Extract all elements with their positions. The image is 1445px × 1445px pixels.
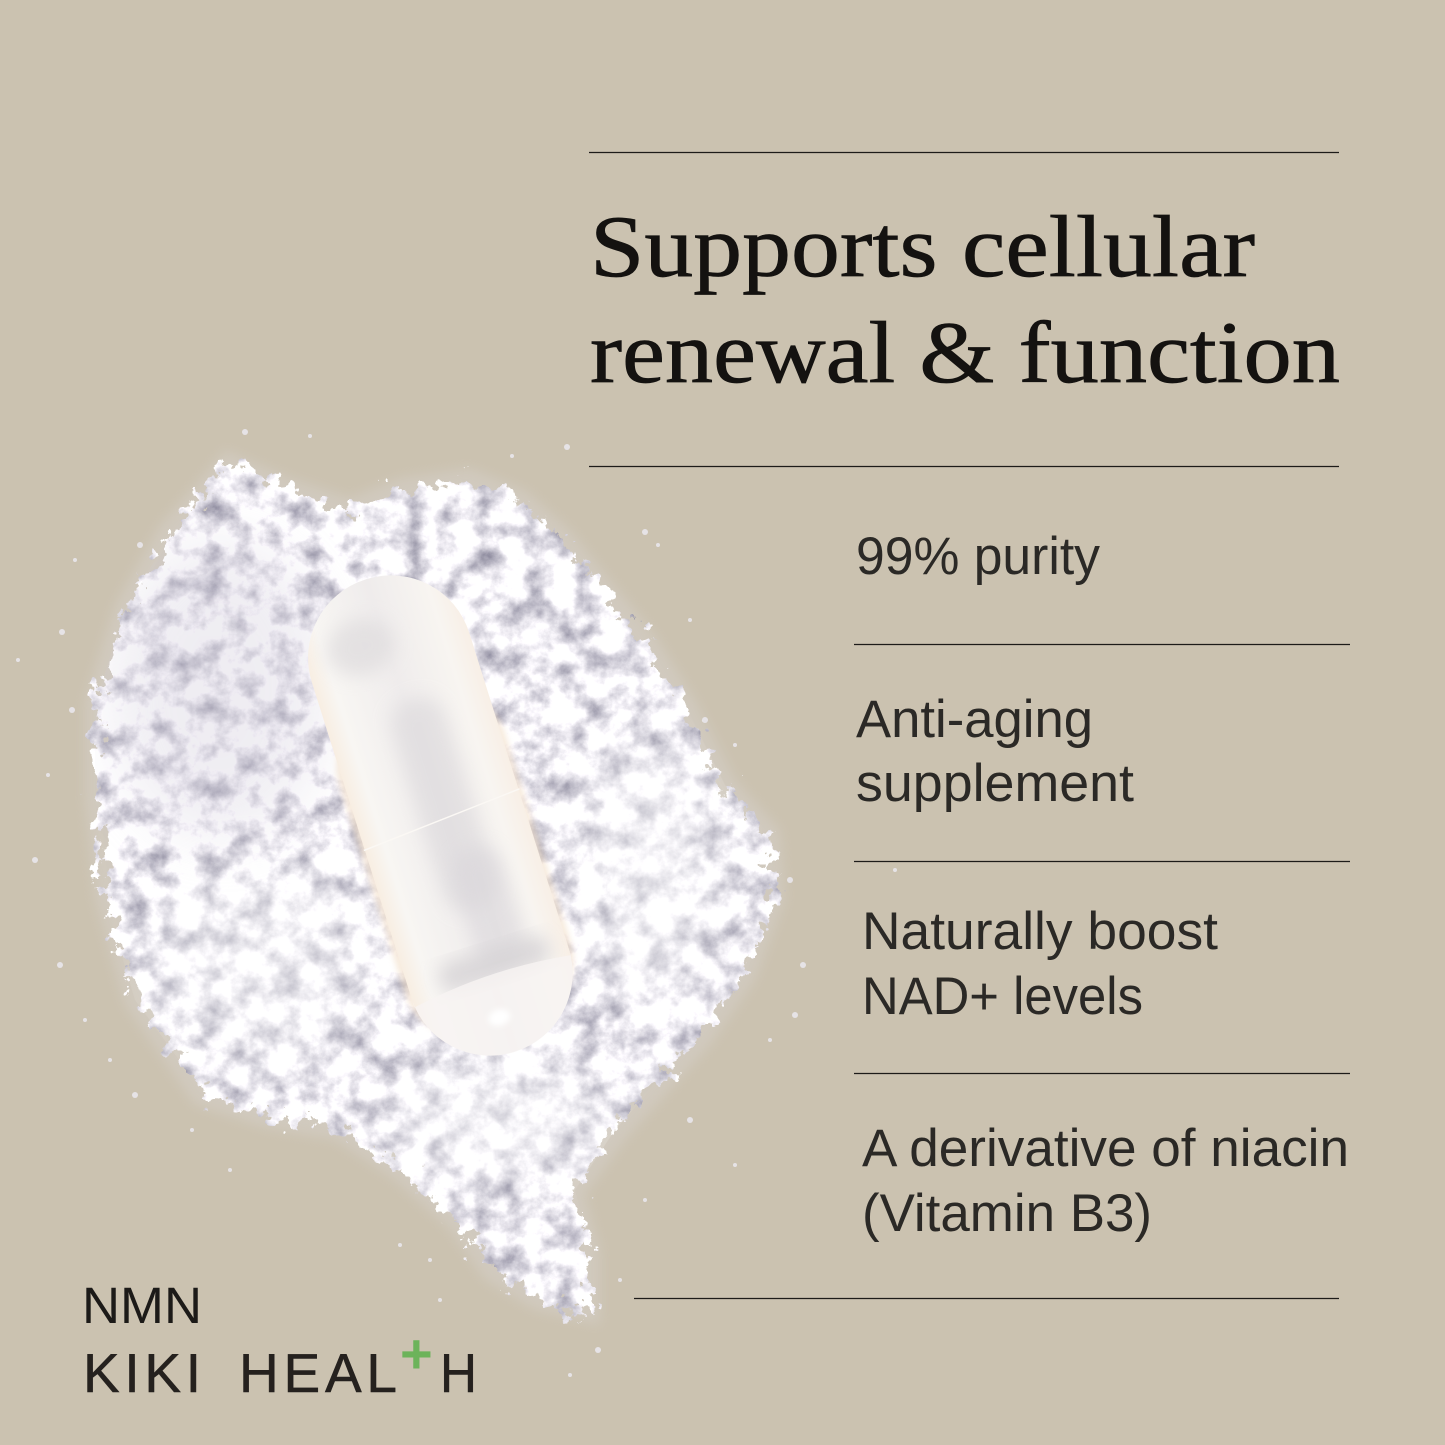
benefit: niacin derivative: A derivative of niacin [862, 1119, 1349, 1178]
powder pile illustration [16, 429, 897, 1377]
powder soft edge [85, 450, 785, 1325]
benefit: 99% purity: 99% purity [856, 527, 1100, 586]
heading line 2: renewal & function [590, 305, 1340, 402]
benefit: niacin derivative: (Vitamin B3) [862, 1184, 1152, 1243]
capsule seam [360, 789, 523, 850]
capsule highlight [486, 1007, 512, 1028]
brand logo [83, 1322, 477, 1404]
powder shading [110, 540, 720, 1180]
benefit: anti-aging supplement: supplement [856, 754, 1134, 813]
brand logo: KIKI [83, 1342, 201, 1404]
heading [590, 199, 1340, 402]
capsule shadow [321, 675, 589, 1052]
scattered powder specks [16, 429, 897, 1377]
benefit: boost NAD+ levels: Naturally boost [862, 902, 1218, 961]
capsule rounded end [411, 948, 594, 1077]
benefit: anti-aging supplement [856, 690, 1134, 813]
product name: NMN [82, 1277, 202, 1334]
brand logo: H [440, 1342, 477, 1404]
capsule translucent streaks [320, 593, 554, 998]
benefit: boost NAD+ levels [862, 902, 1218, 1026]
capsule body [287, 555, 593, 1076]
logo green plus: + [400, 1322, 433, 1385]
brand logo: HEAL [239, 1342, 397, 1404]
heading line 1: Supports cellular [590, 199, 1255, 296]
benefit: anti-aging supplement: Anti-aging [856, 690, 1093, 749]
capsule [282, 553, 597, 1078]
benefit: boost NAD+ levels: NAD+ levels [862, 967, 1143, 1026]
infographic canvas [16, 152, 1350, 1392]
benefit: niacin derivative [862, 1119, 1349, 1243]
